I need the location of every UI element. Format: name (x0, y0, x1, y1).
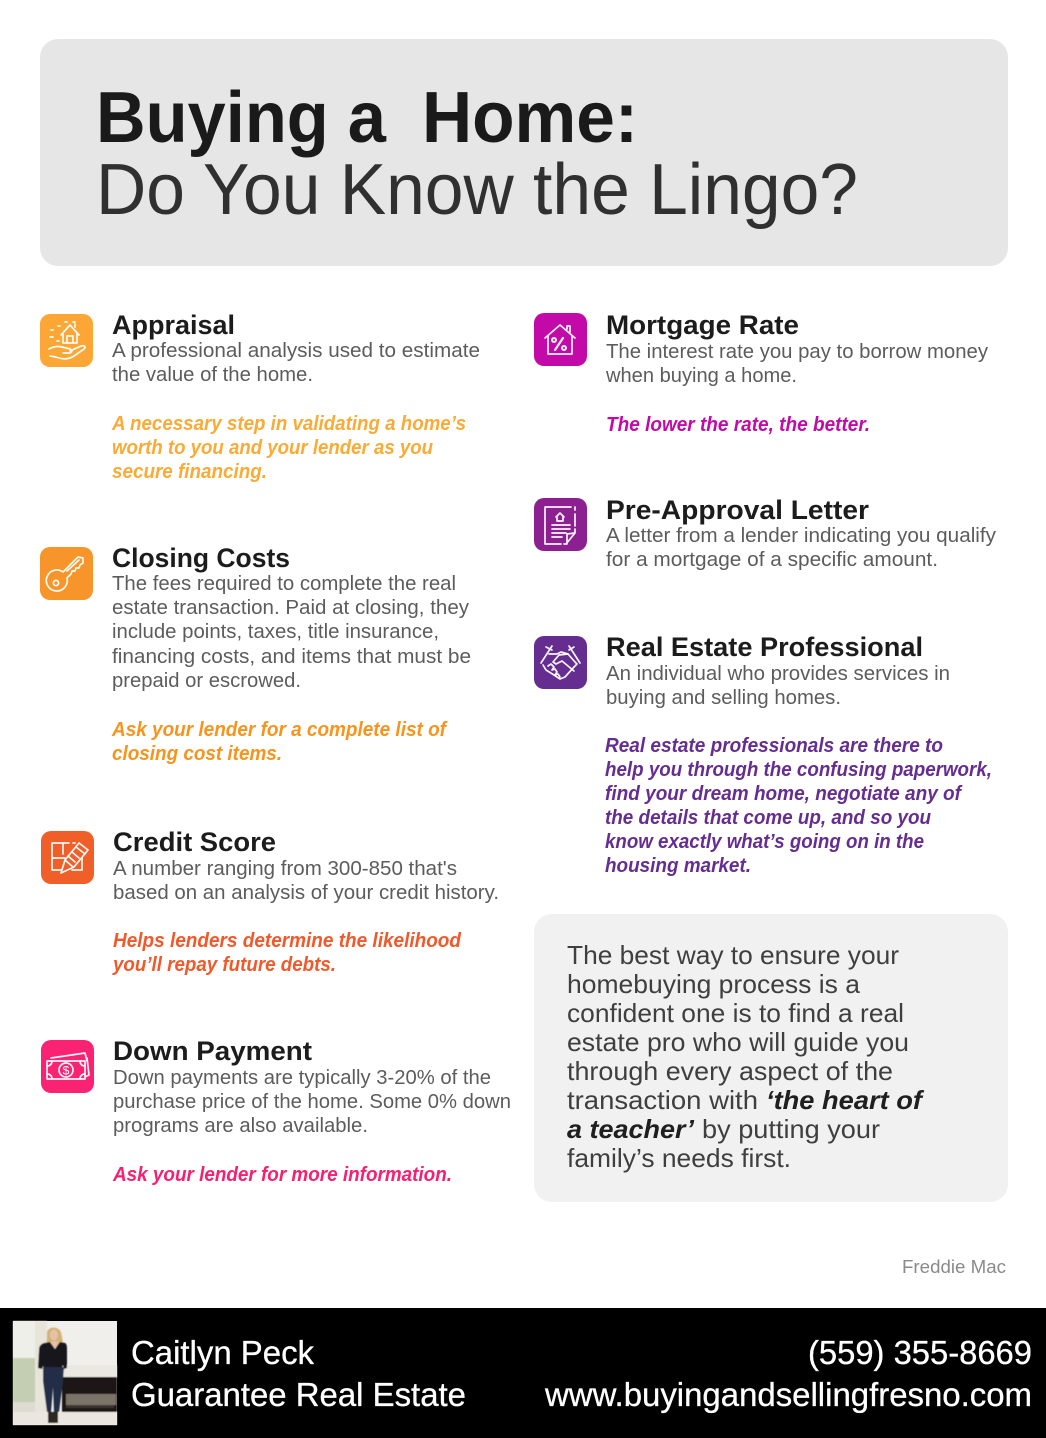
icon: handshake (534, 636, 587, 689)
title: Home: (422, 78, 638, 158)
definition: based on an analysis of your credit history. (113, 882, 499, 904)
definition: programs are also available. (113, 1115, 368, 1137)
panel: real estate professional (534, 632, 992, 877)
heading: Closing Costs (112, 543, 290, 573)
definition: the value of the home. (112, 364, 313, 386)
definition: purchase price of the home. Some 0% down (113, 1091, 511, 1113)
title (96, 78, 858, 230)
brokerage: Guarantee Real Estate (131, 1376, 466, 1413)
note (605, 735, 992, 877)
footer bar (0, 1308, 1046, 1438)
callout: family’s needs first. (567, 1143, 791, 1173)
definition: A professional analysis used to estimate (112, 340, 480, 362)
note (112, 930, 462, 976)
callout: homebuying process is a (567, 969, 861, 999)
source credit: Freddie Mac (902, 1257, 1006, 1277)
website: www.buyingandsellingfresno.com (544, 1376, 1032, 1413)
heading: Real Estate Professional (606, 632, 923, 662)
definition: The interest rate you pay to borrow money (606, 341, 988, 363)
phone: (559) 355-8669 (808, 1334, 1032, 1371)
callout (534, 914, 1008, 1202)
definition: A letter from a lender indicating you qualify (606, 525, 996, 547)
definition (112, 340, 480, 386)
note: worth to you and your lender as you (112, 437, 433, 459)
icon: banknotes: $ (63, 1064, 70, 1078)
definition: include points, taxes, title insurance, (112, 621, 439, 643)
icon: document (534, 498, 587, 551)
agent photo (13, 1321, 117, 1425)
heading: Credit Score (113, 827, 276, 857)
panel: credit score (41, 827, 499, 976)
panel: pre-approval letter (534, 495, 996, 571)
heading: Appraisal (112, 310, 235, 340)
title: Buying a (96, 78, 387, 158)
icon: form and pencil (41, 831, 94, 884)
definition (112, 573, 471, 692)
definition (606, 663, 950, 709)
note: housing market. (605, 855, 751, 877)
callout: ‘the heart of (766, 1085, 924, 1115)
definition: for a mortgage of a specific amount. (606, 549, 938, 571)
callout: by putting your (702, 1114, 880, 1144)
definition: An individual who provides services in (606, 663, 950, 685)
note: Ask your lender for a complete list of (111, 719, 448, 741)
definition: A number ranging from 300-850 that's (113, 858, 457, 880)
note: secure financing. (112, 461, 267, 483)
panel: down payment (41, 1036, 511, 1186)
note: A necessary step in validating a home’s (111, 413, 466, 435)
icon: house in hand (40, 314, 93, 367)
icon: key (40, 547, 93, 600)
definition: The fees required to complete the real (112, 573, 456, 595)
note: The lower the rate, the better. (606, 414, 870, 436)
note: closing cost items. (112, 743, 282, 765)
callout: transaction with (567, 1085, 758, 1115)
note: the details that come up, and so you (605, 807, 931, 829)
heading: Mortgage Rate (606, 310, 799, 340)
definition: financing costs, and items that must be (112, 646, 471, 668)
definition: buying and selling homes. (606, 687, 841, 709)
callout: confident one is to find a real (567, 998, 904, 1028)
note (111, 719, 448, 765)
title panel (40, 39, 1008, 266)
definition (113, 858, 499, 904)
note: find your dream home, negotiate any of (605, 783, 963, 805)
heading: Pre-Approval Letter (606, 495, 870, 525)
panel: mortgage rate (534, 310, 988, 436)
callout: a teacher’ (567, 1114, 695, 1144)
agent name: Caitlyn Peck (131, 1334, 314, 1371)
title: Do You Know the Lingo? (96, 150, 858, 230)
callout: estate pro who will guide you (567, 1027, 909, 1057)
definition (605, 341, 988, 387)
note: know exactly what’s going on in the (605, 831, 924, 853)
definition (113, 1067, 511, 1137)
panel: appraisal (40, 310, 480, 483)
note: you’ll repay future debts. (112, 954, 336, 976)
note: Real estate professionals are there to (605, 735, 943, 757)
icon: banknotes (41, 1040, 94, 1093)
heading: Down Payment (113, 1036, 312, 1066)
callout: through every aspect of the (567, 1056, 893, 1086)
definition: Down payments are typically 3-20% of the (113, 1067, 491, 1089)
note: help you through the confusing paperwork, (605, 759, 992, 781)
definition: estate transaction. Paid at closing, they (112, 597, 469, 619)
definition (606, 525, 996, 571)
callout: The best way to ensure your (567, 940, 899, 970)
note (111, 413, 466, 483)
definition: when buying a home. (605, 365, 797, 387)
definition: prepaid or escrowed. (112, 670, 301, 692)
note: Ask your lender for more information. (112, 1164, 452, 1186)
note: Helps lenders determine the likelihood (113, 930, 462, 952)
icon: house with percent (534, 313, 587, 366)
panel: closing costs (40, 543, 471, 765)
